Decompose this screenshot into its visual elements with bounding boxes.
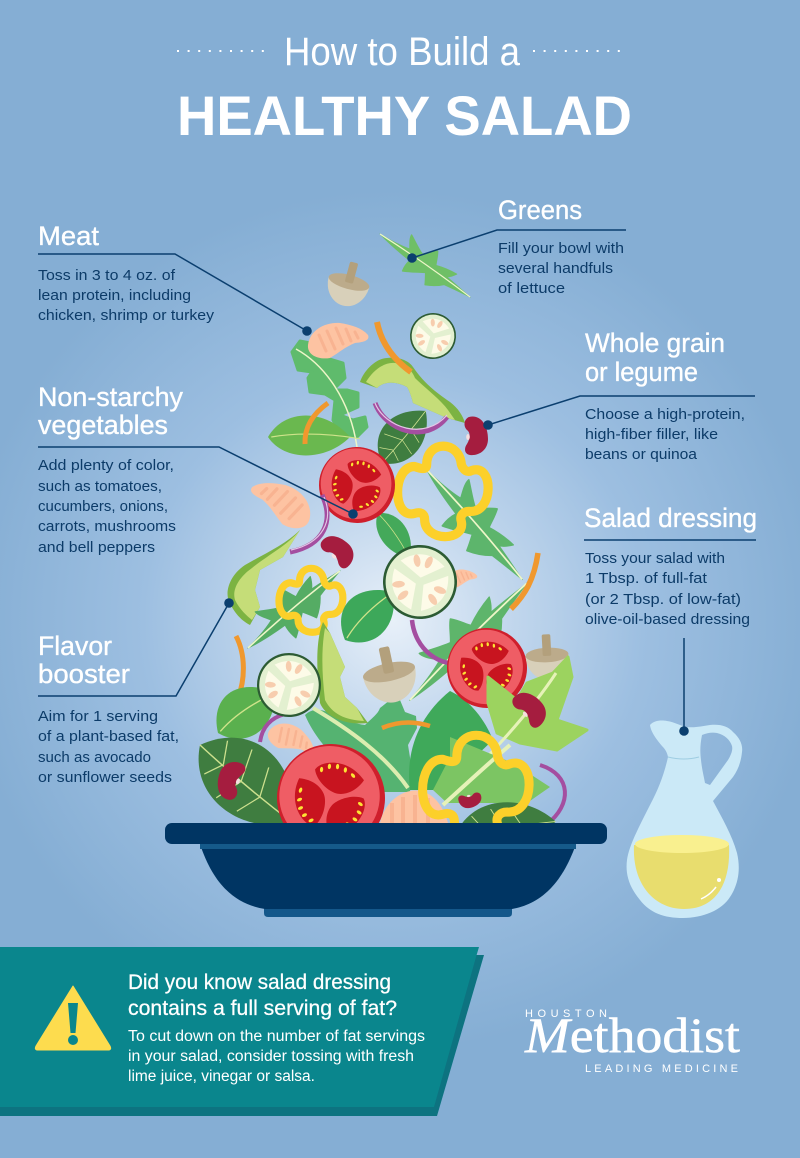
lime lettuce: [445, 657, 587, 800]
top carrot strip: [377, 322, 411, 372]
yellow pepper ring left: [279, 568, 343, 632]
left kidney bean: [318, 529, 360, 571]
chicken piece behind cucumber: [447, 569, 477, 587]
onion arc middle left: [290, 495, 328, 552]
chicken slice lower: [264, 715, 320, 766]
left avocado slice: [228, 530, 300, 625]
text: meat: lean protein, including: [38, 287, 191, 304]
logo: HOUSTON: [525, 1008, 607, 1020]
top mushroom: [322, 257, 375, 311]
oil jug: [627, 720, 742, 918]
callout banner: To cut down on the number of fat servings: [128, 1028, 425, 1045]
right tomato: [444, 625, 530, 711]
meat chicken slice: [308, 323, 368, 358]
lower left green leaf: [203, 667, 295, 751]
lettuce lower right: [433, 737, 550, 805]
top kidney bean: [465, 417, 488, 455]
title: [177, 30, 632, 147]
text: flavor booster: booster: [38, 659, 130, 689]
left carrot strip: [236, 636, 243, 698]
chicken in bowl: [380, 791, 448, 823]
bowl: [165, 823, 607, 917]
left bowl bean: [212, 758, 247, 802]
text: meat: chicken, shrimp or turkey: [38, 307, 215, 324]
text: salad dressing: (or 2 Tbsp. of low-fat): [585, 591, 741, 608]
text: meat: Meat: [38, 221, 100, 251]
small leaf under tomato: [368, 505, 425, 571]
spinach leaf left: [268, 415, 360, 455]
leader lines and dots: [38, 230, 756, 736]
chicken slice left: [243, 474, 318, 533]
text: non-starchy vegetables: vegetables: [38, 410, 168, 440]
title: How to Build a: [284, 30, 521, 74]
lower cucumber: [250, 646, 328, 724]
carrot strip upper left: [305, 403, 328, 444]
top arugula greens: [370, 218, 481, 312]
text: non-starchy vegetables: Add plenty of color,: [38, 457, 174, 474]
callout banner: in your salad, consider tossing with fresh: [128, 1048, 414, 1065]
text: whole grain or legume: Choose a high-protein,: [585, 406, 745, 423]
text: greens: Greens: [498, 195, 582, 225]
center cucumber: [378, 540, 462, 624]
dark leaf bowl right: [456, 798, 557, 850]
text: salad dressing: olive-oil-based dressing: [585, 611, 750, 628]
big tomato: [272, 739, 390, 857]
long onion arc: [412, 620, 465, 664]
top cucumber: [405, 308, 461, 364]
text: meat: Toss in 3 to 4 oz. of: [38, 267, 176, 284]
middle arugula right: [408, 452, 543, 596]
title: HEALTHY SALAD: [177, 84, 632, 147]
text: non-starchy vegetables: cucumbers, onions,: [38, 498, 168, 515]
text: flavor booster: Aim for 1 serving: [38, 708, 158, 725]
callout banner: lime juice, vinegar or salsa.: [128, 1068, 315, 1085]
small green leaf: [327, 569, 414, 655]
big yellow pepper: [423, 735, 529, 842]
text: whole grain or legume: high-fiber filler, like: [585, 426, 718, 443]
tomato upper: [313, 441, 401, 529]
dark veined leaf left: [178, 715, 319, 849]
text: greens: of lettuce: [498, 280, 565, 297]
right mushroom: [524, 633, 570, 681]
callout banner: [0, 947, 484, 1116]
dark green right leaf: [409, 691, 493, 790]
text: salad dressing: Salad dressing: [584, 503, 757, 533]
bean behind pepper: [458, 792, 483, 810]
text: whole grain or legume: or legume: [585, 357, 698, 387]
salad illustration: [178, 218, 587, 857]
text: salad dressing: [584, 503, 757, 628]
text: flavor booster: Flavor: [38, 631, 112, 661]
text: flavor booster: of a plant-based fat,: [38, 728, 179, 745]
lower onion arc left: [260, 714, 285, 742]
text: non-starchy vegetables: carrots, mushrooms: [38, 518, 176, 535]
text: non-starchy vegetables: such as tomatoes,: [38, 478, 162, 495]
left arugula: [232, 552, 355, 666]
text: flavor booster: [38, 631, 179, 786]
text: greens: several handfuls: [498, 260, 613, 277]
callout banner: contains a full serving of fat?: [128, 997, 397, 1020]
logo: Methodist: [524, 1007, 740, 1063]
right kidney bean: [509, 686, 552, 730]
avocado slice center: [317, 622, 368, 724]
yellow pepper ring top: [398, 446, 488, 537]
text: non-starchy vegetables: [38, 382, 183, 556]
text: flavor booster: such as avocado: [38, 749, 151, 766]
text: salad dressing: 1 Tbsp. of full-fat: [585, 570, 708, 587]
callout banner: Did you know salad dressing: [128, 971, 391, 994]
arugula right: [390, 563, 545, 719]
text: non-starchy vegetables: and bell peppers: [38, 539, 155, 556]
center mushroom: [358, 642, 421, 708]
text: meat: [38, 221, 215, 324]
top red onion arc: [375, 403, 447, 432]
text: whole grain or legume: Whole grain: [585, 328, 725, 358]
text: non-starchy vegetables: Non-starchy: [38, 382, 183, 412]
text: salad dressing: Toss your salad with: [585, 550, 725, 567]
text: whole grain or legume: [585, 328, 745, 463]
icon: warning triangle: [35, 986, 111, 1050]
right lower onion: [540, 765, 565, 824]
text: whole grain or legume: beans or quinoa: [585, 446, 698, 463]
dark leaf top: [365, 397, 440, 475]
logo: LEADING MEDICINE: [585, 1063, 738, 1075]
top avocado slice: [360, 358, 465, 423]
big lobed arugula leaf: [292, 341, 367, 447]
text: flavor booster: or sunflower seeds: [38, 769, 172, 786]
carrot strip center: [382, 722, 430, 728]
carrot strip right: [511, 553, 538, 609]
text: greens: Fill your bowl with: [498, 240, 624, 257]
text: greens: [498, 195, 624, 297]
center lettuce: [305, 700, 417, 792]
